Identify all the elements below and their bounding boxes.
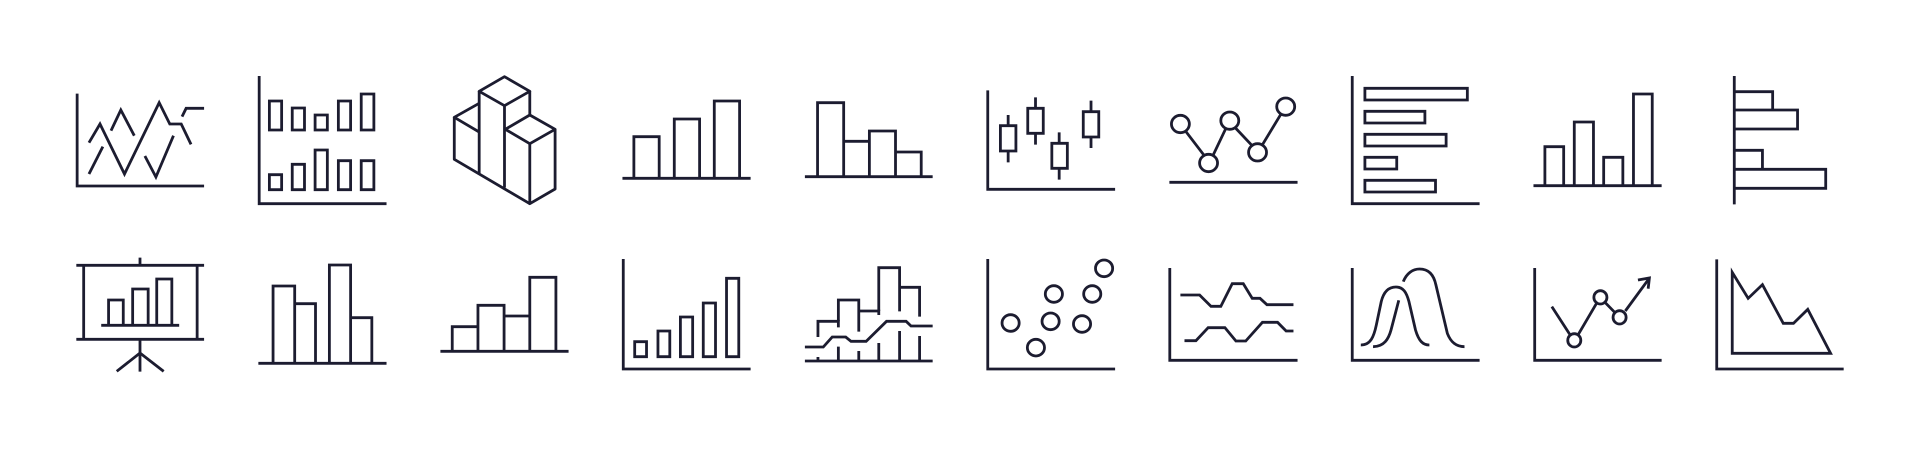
icon: growing narrow bars with axes bbox=[623, 259, 751, 369]
icon: area chart bbox=[1717, 259, 1844, 369]
icon: presentation board with bars bbox=[76, 258, 204, 372]
icon: horizontal bar chart with axes bbox=[1352, 76, 1480, 204]
icon: paired tall bars bbox=[258, 265, 387, 363]
icon: bell curves bbox=[1352, 268, 1480, 360]
icon: scatter plot bbox=[988, 259, 1115, 369]
icon: tangled line chart bbox=[77, 94, 204, 186]
icon: isometric 3D bars bbox=[454, 77, 555, 204]
icon: three rising bars bbox=[622, 101, 751, 178]
icon: descending bars bbox=[805, 103, 933, 177]
icon: two step lines bbox=[1170, 268, 1298, 360]
icon: line chart with arrow bbox=[1535, 268, 1662, 360]
icon: horizontal grouped bars bbox=[1734, 76, 1826, 204]
icon: stepped wide bars bbox=[440, 277, 569, 351]
icon: histogram with trend line bbox=[805, 268, 933, 361]
icon: two rows of small bars bbox=[259, 76, 387, 204]
icon: line chart with circle markers bbox=[1169, 98, 1298, 182]
icon: candlestick chart bbox=[988, 90, 1115, 189]
icon: four narrow bars bbox=[1533, 94, 1662, 186]
